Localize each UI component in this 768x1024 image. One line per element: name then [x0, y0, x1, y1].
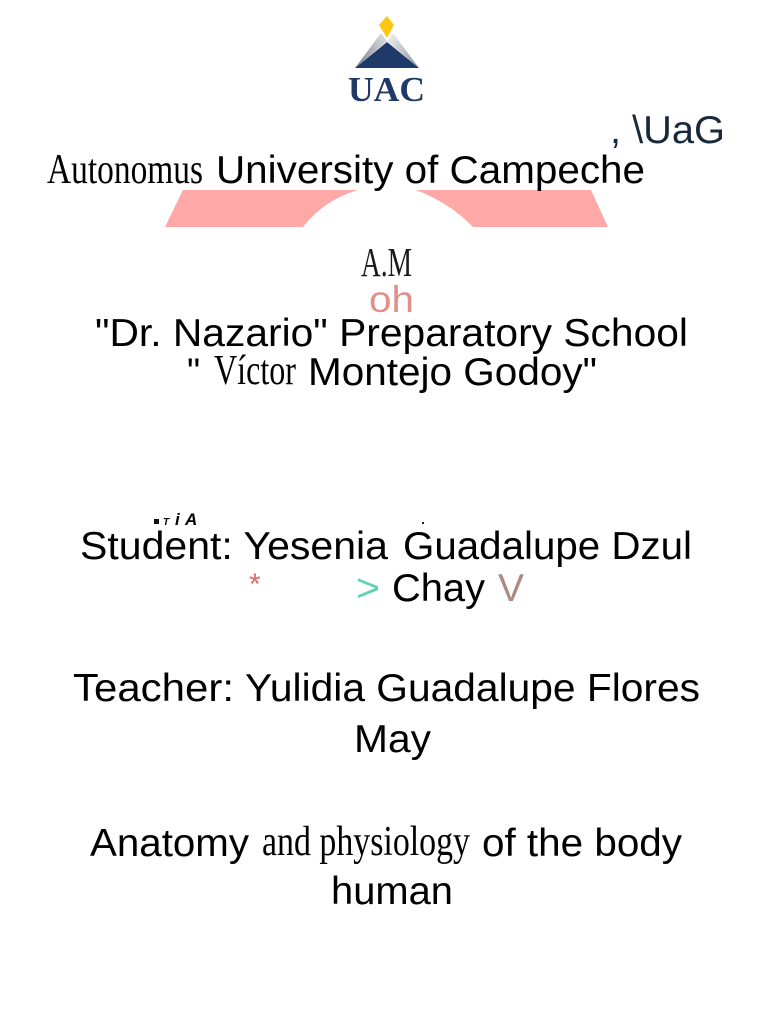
- small marks above student: T: [163, 517, 170, 528]
- student name: Student: Yesenia: [80, 525, 388, 568]
- school name: [95, 312, 688, 394]
- teacher: Yulidia Guadalupe Flores: [245, 667, 700, 710]
- subject: Anatomy: [90, 822, 250, 865]
- small marks above student: i: [175, 510, 181, 529]
- student name second line: V: [498, 567, 524, 610]
- subject: of the body: [482, 822, 683, 865]
- school name: "Dr. Nazario" Preparatory School: [95, 312, 688, 355]
- label: oh: oh: [369, 279, 414, 320]
- icon: navy mountain: [355, 42, 419, 68]
- subject: human: [331, 870, 453, 913]
- university name: [47, 147, 645, 193]
- student name second line: *: [249, 568, 261, 601]
- university name: University of Campeche: [216, 149, 645, 192]
- student name second line: [249, 567, 524, 610]
- teacher: May: [354, 718, 432, 761]
- school name: Montejo Godoy": [308, 351, 597, 394]
- icon: yellow diamond: [379, 16, 394, 38]
- icon: silver mountain wings: [355, 33, 387, 68]
- header fragment: , \UaG: [610, 109, 725, 152]
- label: A.M: A.M: [361, 239, 412, 285]
- student name: Guadalupe Dzul: [403, 525, 692, 568]
- teacher: Teacher:: [73, 667, 234, 710]
- student name: [80, 525, 692, 568]
- small marks above student: [154, 510, 424, 529]
- logo wordmark: UAC: [348, 70, 425, 109]
- logo: UAC: [348, 16, 425, 109]
- subject: and physiology: [262, 819, 470, 865]
- small marks above student: A: [184, 510, 197, 529]
- teacher: [73, 667, 700, 761]
- student name second line: Chay: [392, 567, 486, 610]
- student name second line: >: [356, 567, 380, 610]
- pink arch banner: [165, 190, 608, 227]
- school name: Víctor: [214, 348, 296, 394]
- school name: ": [187, 351, 200, 392]
- subject: [90, 819, 683, 913]
- university name: Autonomus: [47, 147, 203, 193]
